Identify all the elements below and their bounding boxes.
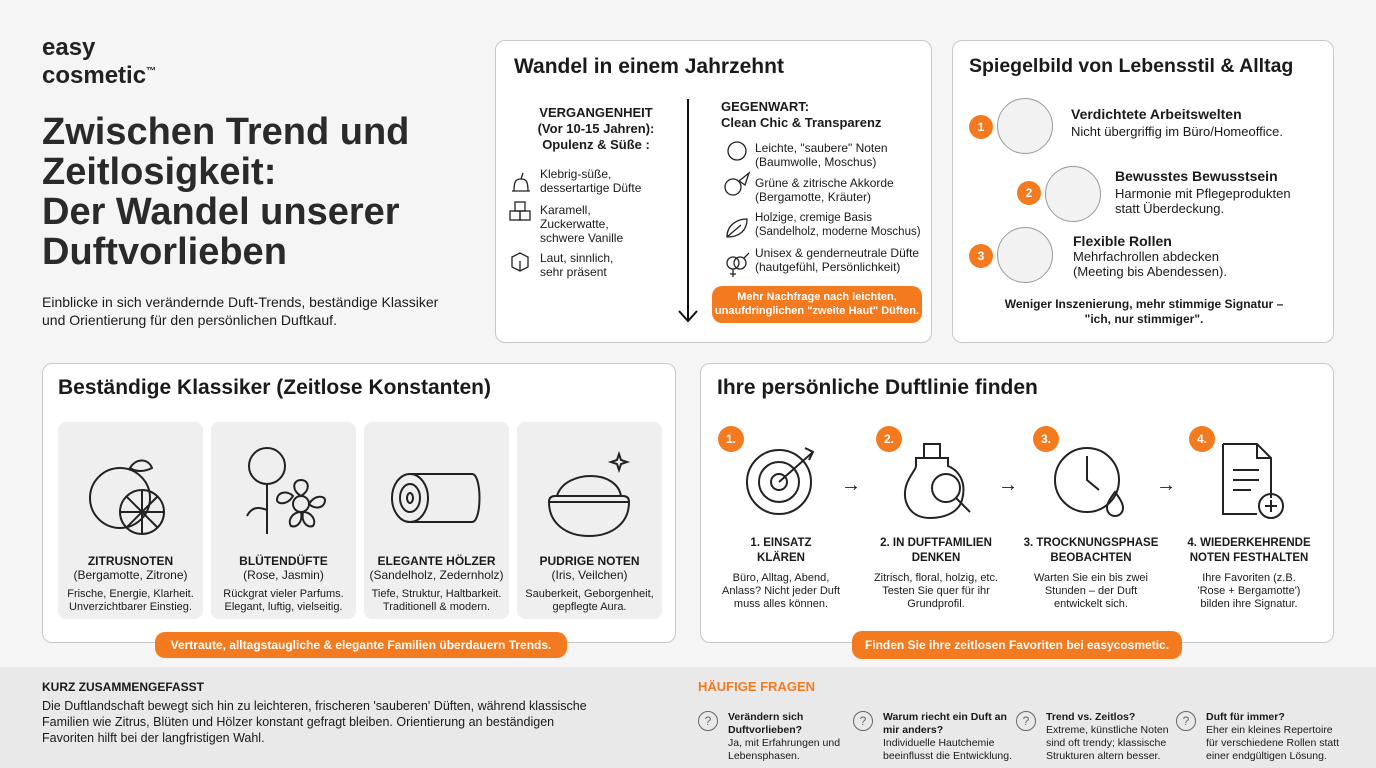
panel: Beständige Klassiker <box>42 363 676 643</box>
panel: Wandel in einem Jahrzehnt: Laut, sinnlich, <box>540 251 613 265</box>
panel: Wandel in einem Jahrzehnt: Karamell, <box>540 203 591 217</box>
step 1: 1. <box>726 432 736 446</box>
callout <box>712 286 922 323</box>
step 4: 4. <box>1197 432 1207 446</box>
step 2: Grundprofil. <box>907 598 965 610</box>
arrow: → <box>841 474 861 496</box>
item 2: 2 <box>1026 186 1032 200</box>
step 3: Warten Sie ein bis zwei <box>1034 572 1148 584</box>
FAQ: Extreme, künstliche Noten <box>1046 724 1169 736</box>
FAQ: Eher ein kleines Repertoire <box>1206 724 1333 736</box>
card: Blüten <box>211 422 356 619</box>
logo <box>42 34 156 89</box>
card: Blüten: Rückgrat vieler Parfums. <box>223 588 344 600</box>
panel: Wandel in einem Jahrzehnt: schwere Vanille <box>540 231 623 245</box>
item 3: Flexible Rollen <box>1073 233 1172 249</box>
step 4: NOTEN FESTHALTEN <box>1190 552 1308 564</box>
card: Zitrus: Unverzichtbarer Einstieg. <box>69 601 192 613</box>
step 4: 4. WIEDERKEHRENDE <box>1187 537 1311 549</box>
arrow: → <box>998 474 1018 496</box>
bottom band <box>0 667 1376 768</box>
FAQ: Ja, mit Erfahrungen und <box>728 737 840 749</box>
step 2: Zitrisch, floral, holzig, etc. <box>874 572 998 584</box>
FAQ: Duftvorlieben? <box>728 724 802 736</box>
step 4: Ihre Favoriten (z.B. <box>1202 572 1296 584</box>
card: Zitrus: (Bergamotte, Zitrone) <box>73 568 188 582</box>
item 2: Harmonie mit Pflegeprodukten <box>1115 186 1291 201</box>
step 2: DENKEN <box>912 552 960 564</box>
FAQ: Verändern sich <box>728 711 803 723</box>
logo: easy <box>42 34 95 61</box>
callout: Finden Sie ihre zeitlosen Favoriten bei easycosmetic. <box>865 638 1169 652</box>
summary line: "ich, nur stimmiger". <box>1085 312 1203 326</box>
step 4: bilden ihre Signatur. <box>1200 598 1298 610</box>
step 1: Anlass? Nicht jeder Duft <box>722 585 840 597</box>
summary: Familien wie Zitrus, Blüten und Hölzer konstant gefragt bleiben. Orientierung an beständigen <box>42 715 554 729</box>
step 2: 2. IN DUFTFAMILIEN <box>880 537 992 549</box>
step 4: 'Rose + Bergamotte') <box>1198 585 1300 597</box>
item 3: 3 <box>978 249 984 263</box>
past column: VERGANGENHEIT <box>539 105 653 120</box>
FAQ: HÄUFIGE FRAGEN <box>698 679 815 694</box>
step 3 <box>1024 426 1158 610</box>
item 1: Nicht übergriffig im Büro/Homeoffice. <box>1071 124 1283 139</box>
panel: Wandel in einem Jahrzehnt: (Sandelholz, moderne Moschus) <box>755 226 921 238</box>
card: Pudrig: Sauberkeit, Geborgenheit, <box>525 588 654 600</box>
timeline arrow <box>678 99 698 322</box>
step 2: 2. <box>884 432 894 446</box>
step 2: Testen Sie quer für ihr <box>882 585 990 597</box>
card: Pudrig: PUDRIGE NOTEN <box>539 554 640 568</box>
FAQ: sind oft trendy; klassische <box>1046 737 1166 749</box>
step 1: Büro, Alltag, Abend, <box>733 572 829 584</box>
panel: Wandel in einem Jahrzehnt: Grüne & zitrische Akkorde <box>755 176 894 190</box>
callout: Vertraute, alltagstaugliche & elegante Familien überdauern Trends. <box>171 638 551 652</box>
panel: Wandel in einem Jahrzehnt: Klebrig-süße, <box>540 167 611 181</box>
card: Hölzer: Tiefe, Struktur, Haltbarkeit. <box>372 588 501 600</box>
item 1 <box>969 98 1283 154</box>
step 1 <box>718 426 840 610</box>
item 2: statt Überdeckung. <box>1115 201 1224 216</box>
card: Blüten: Elegant, luftig, vielseitig. <box>224 601 342 613</box>
present column: Clean Chic & Transparenz <box>721 115 881 130</box>
FAQ: ? <box>705 714 711 728</box>
FAQ: Lebensphasen. <box>728 750 800 762</box>
card: Hölzer: (Sandelholz, Zedernholz) <box>369 568 504 582</box>
step 3: 3. TROCKNUNGSPHASE <box>1024 537 1158 549</box>
item 3: (Meeting bis Abendessen). <box>1073 264 1227 279</box>
step 3: 3. <box>1041 432 1051 446</box>
panel: Wandel in einem Jahrzehnt: Holzige, cremige Basis <box>755 212 872 224</box>
card: Pudrig: gepflegte Aura. <box>552 601 626 613</box>
heading: Ihre persönliche Duftlinie finden <box>717 376 1038 399</box>
callout <box>155 632 567 658</box>
FAQ: Duft für immer? <box>1206 711 1285 723</box>
step 1: muss alles können. <box>734 598 828 610</box>
FAQ: für verschiedene Rollen statt <box>1206 737 1339 749</box>
past column: Opulenz & Süße : <box>542 137 650 152</box>
card: Hölzer: ELEGANTE HÖLZER <box>377 554 496 568</box>
card: Hölzer <box>364 422 509 619</box>
panel: Wandel in einem Jahrzehnt: (Bergamotte, Kräuter) <box>755 190 871 204</box>
card: Blüten: BLÜTENDÜFTE <box>239 554 328 568</box>
FAQ: beeinflusst die Entwicklung. <box>883 750 1012 762</box>
summary: KURZ ZUSAMMENGEFASST <box>42 680 204 694</box>
FAQ: einer endgültigen Lösung. <box>1206 750 1327 762</box>
item 2: Bewusstes Bewusstsein <box>1115 168 1278 184</box>
logo: cosmetic™ <box>42 62 156 89</box>
heading: Spiegelbild von Lebensstil & Alltag <box>969 55 1293 77</box>
FAQ: Individuelle Hautchemie <box>883 737 994 749</box>
present column: GEGENWART: <box>721 99 809 114</box>
title: Zwischen Trend und <box>42 111 409 153</box>
step 1: KLÄREN <box>757 552 805 564</box>
past column: (Vor 10-15 Jahren): <box>538 121 654 136</box>
card: Zitrus: ZITRUSNOTEN <box>88 554 173 568</box>
arrow: → <box>1156 474 1176 496</box>
summary <box>42 680 587 745</box>
panel: Wandel in einem Jahrzehnt <box>495 40 932 343</box>
callout <box>852 631 1182 659</box>
item 1: Verdichtete Arbeitswelten <box>1071 106 1242 122</box>
subtitle: Einblicke in sich verändernde Duft-Trends, beständige Klassiker <box>42 294 438 310</box>
panel: Wandel in einem Jahrzehnt: Unisex & genderneutrale Düfte <box>755 246 919 260</box>
card: Zitrus <box>58 422 203 619</box>
card: Hölzer: Traditionell & modern. <box>383 601 490 613</box>
summary line <box>1004 297 1283 326</box>
present column <box>721 99 921 277</box>
item 3: Mehrfachrollen abdecken <box>1073 249 1219 264</box>
past column <box>509 105 654 279</box>
callout: Mehr Nachfrage nach leichten, <box>737 291 897 303</box>
callout: unaufdringlichen "zweite Haut" Düften. <box>715 305 919 317</box>
panel: Ihre persönliche Duftlinie <box>700 363 1334 643</box>
subtitle: und Orientierung für den persönlichen Duftkauf. <box>42 312 337 328</box>
panel: Wandel in einem Jahrzehnt: (hautgefühl, Persönlichkeit) <box>755 260 900 274</box>
heading: Beständige Klassiker (Zeitlose Konstanten) <box>58 376 491 399</box>
panel: Wandel in einem Jahrzehnt: dessertartige Düfte <box>540 181 641 195</box>
card: Zitrus: Frische, Energie, Klarheit. <box>67 588 194 600</box>
heading: Wandel in einem Jahrzehnt <box>514 55 784 78</box>
subtitle <box>42 294 438 328</box>
panel: Wandel in einem Jahrzehnt: Zuckerwatte, <box>540 217 609 231</box>
summary: Die Duftlandschaft bewegt sich hin zu leichteren, frischeren 'sauberen' Düften, während klassische <box>42 699 587 713</box>
FAQ: ? <box>1023 714 1029 728</box>
step 3: BEOBACHTEN <box>1050 552 1132 564</box>
step 3: entwickelt sich. <box>1054 598 1128 610</box>
FAQ: Trend vs. Zeitlos? <box>1046 711 1135 723</box>
panel: Wandel in einem Jahrzehnt: sehr präsent <box>540 265 607 279</box>
item 2 <box>1017 166 1291 222</box>
FAQ: mir anders? <box>883 724 943 736</box>
card: Pudrig <box>517 422 662 619</box>
title: Zeitlosigkeit: <box>42 151 276 193</box>
title: Duftvorlieben <box>42 231 287 273</box>
summary line: Weniger Inszenierung, mehr stimmige Signatur – <box>1005 297 1283 311</box>
title: Der Wandel unserer <box>42 191 400 233</box>
FAQ: ? <box>1183 714 1189 728</box>
summary: Favoriten hilft bei der langfristigen Wahl. <box>42 731 265 745</box>
card: Blüten: (Rose, Jasmin) <box>243 568 324 582</box>
FAQ <box>698 679 1339 762</box>
FAQ: Strukturen altern besser. <box>1046 750 1160 762</box>
panel: Spiegelbild <box>952 40 1334 343</box>
FAQ: ? <box>860 714 866 728</box>
item 1: 1 <box>978 120 984 134</box>
panel: Wandel in einem Jahrzehnt: (Baumwolle, Moschus) <box>755 155 876 169</box>
card: Pudrig: (Iris, Veilchen) <box>551 568 628 582</box>
step 4 <box>1187 426 1311 610</box>
step 2 <box>874 426 998 610</box>
panel: Wandel in einem Jahrzehnt: Leichte, "saubere" Noten <box>755 141 888 155</box>
step 1: 1. EINSATZ <box>750 537 812 549</box>
step 3: Stunden – der Duft <box>1045 585 1137 597</box>
title <box>42 111 409 273</box>
item 3 <box>969 227 1227 283</box>
FAQ: Warum riecht ein Duft an <box>883 711 1007 723</box>
